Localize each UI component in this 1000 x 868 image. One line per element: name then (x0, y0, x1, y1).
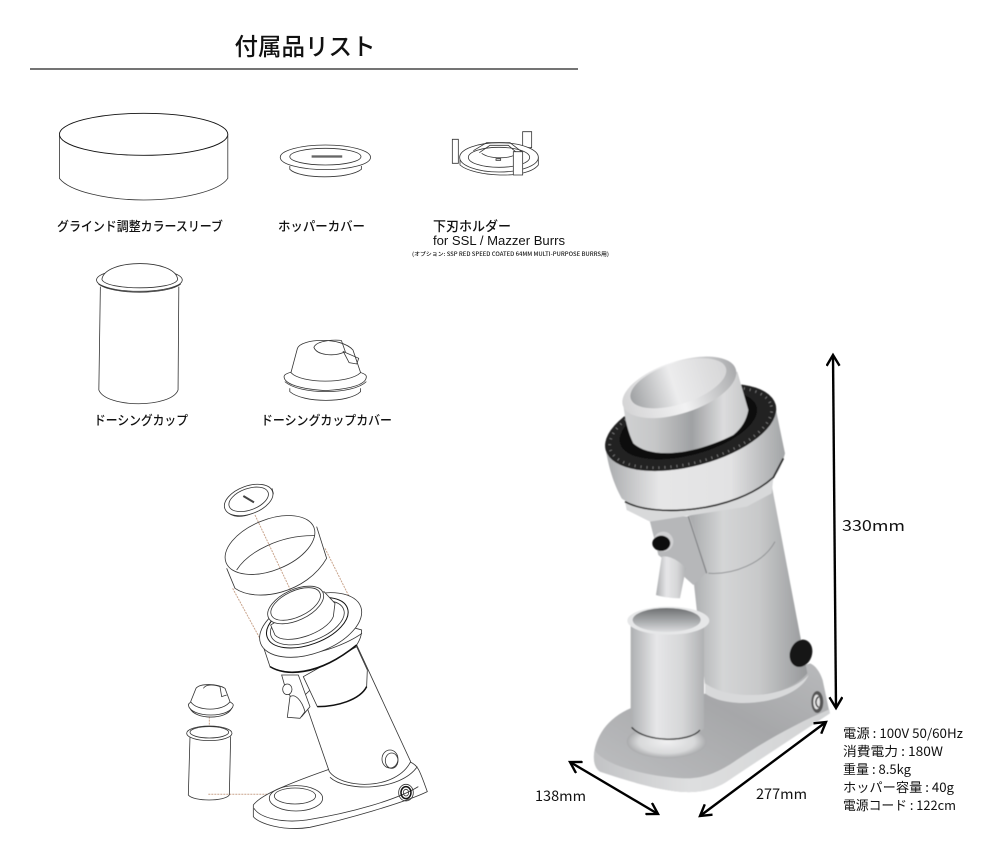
specifications: 消費電力 : 180W (843, 741, 944, 760)
dosing cup foot (627, 725, 707, 758)
black scale dial (596, 367, 786, 487)
arrow: height (833, 355, 836, 708)
accessory: lower burr holder (452, 132, 538, 175)
title underline (30, 68, 578, 70)
lower collar (625, 478, 773, 522)
hopper (271, 592, 335, 639)
specifications: ホッパー容量 : 40g (843, 777, 955, 796)
hopper cover (220, 478, 277, 522)
power button (811, 691, 823, 713)
exploded line drawing of grinder (187, 478, 427, 828)
column (648, 485, 809, 703)
specifications: 重量 : 8.5kg (843, 759, 912, 778)
grind head (596, 344, 786, 522)
sleeve section and chute (303, 647, 367, 707)
hopper (623, 372, 748, 453)
arrow: depth (570, 762, 658, 814)
head ring (605, 405, 785, 511)
spout (656, 556, 686, 598)
label: lower burr holder: for SSL / Mazzer Burrs (433, 233, 566, 248)
head ring (260, 613, 362, 672)
guide lines (208, 515, 352, 794)
title: 付属品リスト (234, 27, 376, 62)
dosing cup (631, 623, 704, 740)
column (303, 645, 411, 784)
base (594, 663, 830, 792)
label: dosing cup: ドーシングカップ (94, 410, 188, 429)
photo of assembled grinder (594, 344, 830, 792)
dimension: 330mm: 330mm (842, 515, 905, 536)
label: hopper cover: ホッパーカバー (278, 216, 365, 235)
dimension: 138mm: 138mm (535, 786, 586, 806)
specifications: 電源 : 100V 50/60Hz (843, 723, 963, 742)
dosing cup cover (188, 685, 233, 717)
dimension: 277mm: 277mm (756, 784, 807, 804)
collar sleeve (217, 504, 327, 595)
specifications (843, 723, 963, 814)
label: dosing cup cover: ドーシングカップカバー (261, 410, 392, 429)
accessory: dosing cup (97, 264, 182, 404)
rear knob and cup (627, 607, 823, 758)
label: lower burr holder: 下刃ホルダー (433, 215, 511, 235)
arrow: width (700, 722, 826, 816)
label: collar sleeve: グラインド調整カラースリーブ (57, 216, 223, 235)
chute housing (648, 515, 707, 585)
accessory: grind adjustment collar sleeve (59, 113, 228, 200)
base (253, 762, 427, 828)
dosing cup (187, 726, 232, 800)
front knob (653, 532, 673, 552)
accessory: hopper cover (280, 145, 371, 177)
accessory: dosing cup cover (284, 340, 366, 400)
specifications: 電源コード : 122cm (843, 795, 956, 814)
label: lower burr holder: (オプション: SSP RED SPEED COATED 64MM MULTI-PURPOSE BURRS用) (412, 250, 609, 258)
label: lower burr holder (412, 215, 609, 258)
